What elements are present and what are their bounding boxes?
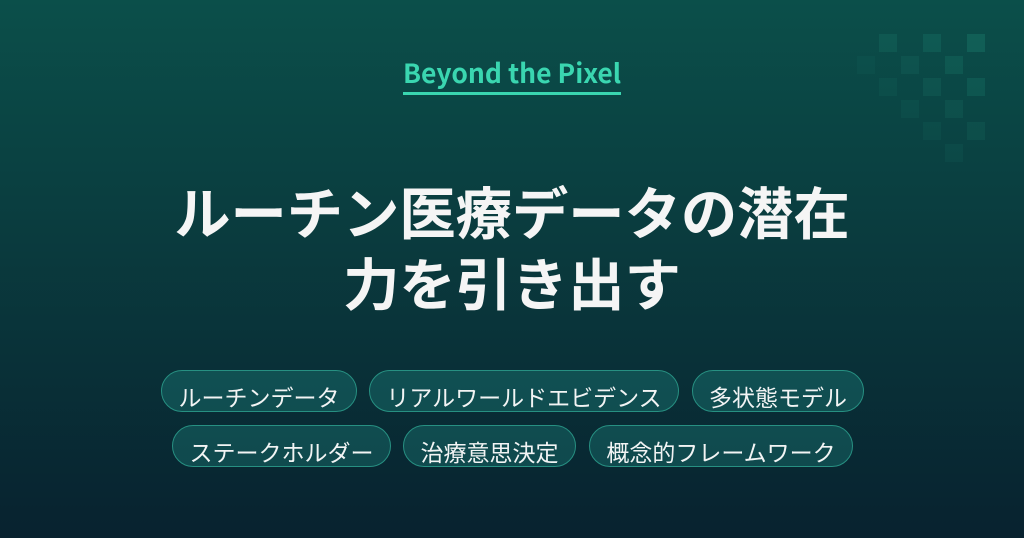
tag: treatment decision xyxy=(403,425,576,467)
tag: real world evidence: リアルワールドエビデンス xyxy=(386,379,662,413)
decorative pixel grid xyxy=(879,34,985,140)
tag: conceptual framework: 概念的フレームワーク xyxy=(606,434,836,468)
tag: conceptual framework xyxy=(589,425,853,467)
keyword tags xyxy=(161,370,864,468)
tag: routine data xyxy=(161,370,357,412)
title: ルーチン医療データの潜在 xyxy=(174,170,850,251)
tag: stakeholder: ステークホルダー xyxy=(190,434,374,468)
tag: multi-state model: 多状態モデル xyxy=(709,379,847,413)
tag: stakeholder xyxy=(172,425,391,467)
brand heading with underline: Beyond the Pixel xyxy=(403,52,621,91)
tag: multi-state model xyxy=(692,370,864,412)
tag: real world evidence xyxy=(369,370,679,412)
title xyxy=(174,170,850,322)
tag: routine data: ルーチンデータ xyxy=(178,379,340,413)
title: 力を引き出す xyxy=(343,241,681,322)
tag: treatment decision: 治療意思決定 xyxy=(420,434,558,468)
